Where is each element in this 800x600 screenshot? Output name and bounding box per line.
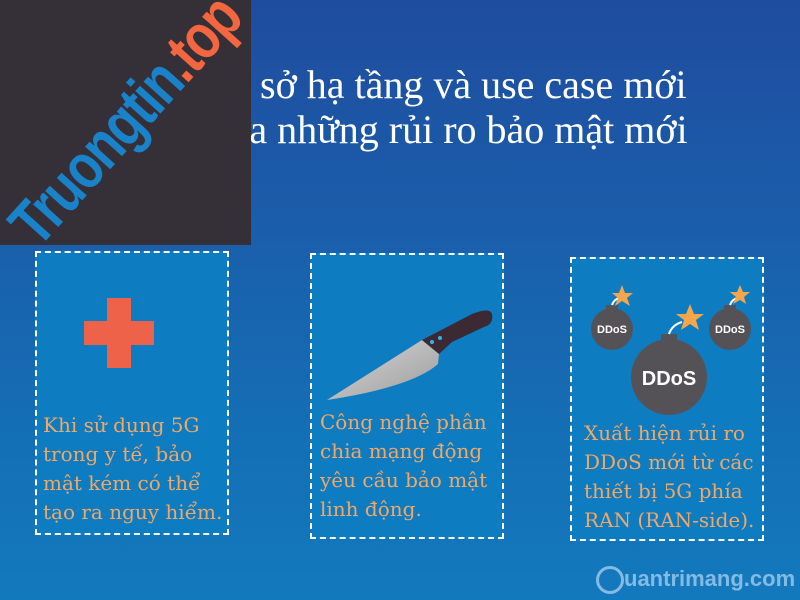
title bbox=[236, 62, 688, 152]
icon: DDoS bombs: DDoS bbox=[715, 324, 745, 336]
panel: network slicing bbox=[310, 253, 504, 539]
watermark: quantrimang.com: uantrimang.com bbox=[624, 566, 795, 591]
icon: DDoS bombs: DDoS bbox=[642, 368, 696, 390]
text: DDoS: RAN (RAN-side). bbox=[584, 508, 754, 532]
text: network slicing: linh động. bbox=[320, 497, 422, 521]
text: network slicing: yêu cầu bảo mật bbox=[320, 468, 487, 492]
title: sở hạ tầng và use case mới bbox=[260, 62, 687, 107]
text: healthcare: mật kém có thể bbox=[43, 471, 200, 495]
title: ra những rủi ro bảo mật mới bbox=[236, 107, 688, 152]
icon: DDoS bombs: DDoS bbox=[597, 324, 627, 336]
panel: DDoS bbox=[570, 257, 764, 541]
text: healthcare: tạo ra nguy hiểm. bbox=[43, 500, 222, 524]
text: DDoS: thiết bị 5G phía bbox=[584, 479, 743, 503]
icon: DDoS bombs bbox=[591, 285, 751, 415]
icon: red cross bbox=[84, 298, 154, 368]
text: healthcare: trong y tế, bảo bbox=[43, 442, 192, 466]
text: DDoS bbox=[584, 421, 754, 532]
text: healthcare bbox=[43, 413, 222, 524]
icon: knife bbox=[327, 310, 492, 400]
text: network slicing: chia mạng động bbox=[320, 439, 482, 463]
text: network slicing bbox=[320, 410, 487, 521]
text: healthcare: Khi sử dụng 5G bbox=[43, 413, 200, 437]
text: network slicing: Công nghệ phân bbox=[320, 410, 487, 434]
text: DDoS: Xuất hiện rủi ro bbox=[584, 421, 745, 445]
text: DDoS: DDoS mới từ các bbox=[584, 450, 754, 474]
panel: healthcare bbox=[35, 251, 229, 535]
